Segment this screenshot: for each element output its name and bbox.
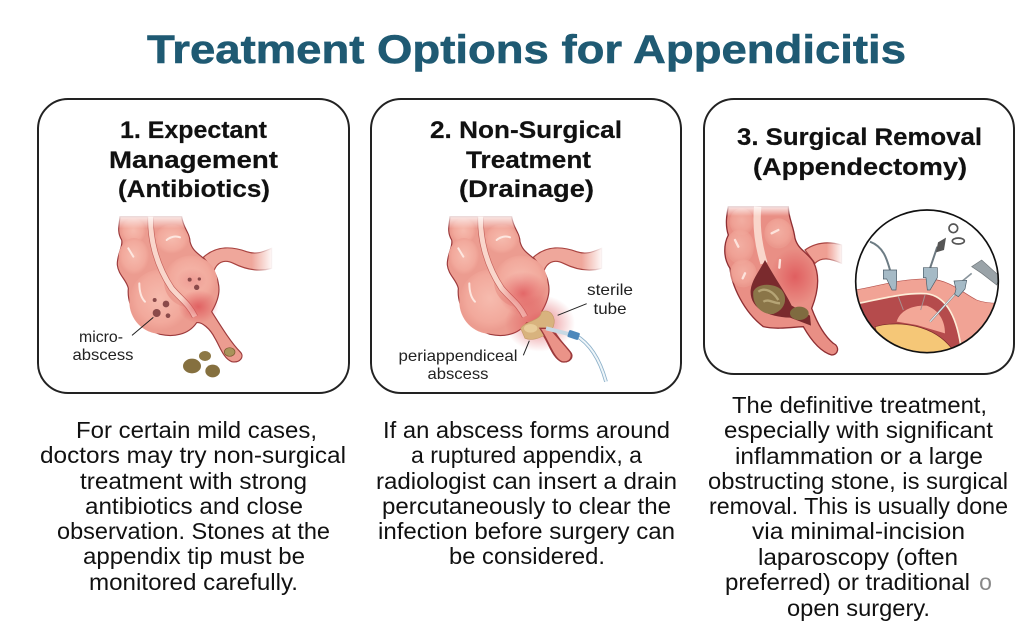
heading: panel 3	[737, 124, 982, 181]
text block: panel 3 description: especially with significant	[724, 417, 994, 443]
text block: panel 2 description: a ruptured appendix, a	[411, 442, 642, 468]
illustration: appendix with obstructing stone	[723, 204, 843, 355]
text block: panel 2 description: infection before surgery can	[378, 518, 675, 544]
heading: panel 2: 2. Non-Surgical	[430, 117, 622, 144]
text block: panel 3 description: obstructing stone, is surgical	[708, 468, 1008, 494]
text block: panel 3 description: The definitive treatment,	[732, 392, 987, 418]
text block: panel 1 description: appendix tip must be	[83, 543, 305, 569]
text block: panel 1 description: observation. Stones at the	[57, 518, 330, 544]
text block: panel 1 description: doctors may try non-surgical	[40, 442, 346, 468]
text block: panel 2 description: percutaneously to clear the	[382, 493, 671, 519]
text block: panel 3 description: removal. This is usually done	[709, 493, 1008, 519]
text block: panel 3 description: inflammation or a large	[735, 443, 983, 469]
panel: expectant management	[38, 99, 349, 393]
heading: panel 2: Treatment	[466, 147, 591, 174]
heading: panel 1: Management	[109, 147, 278, 174]
text block: panel 3 description: via minimal-incision	[752, 518, 965, 544]
heading: panel 2	[430, 117, 622, 203]
text block: panel 2 description	[376, 417, 677, 569]
title: Treatment Options for Appendicitis	[147, 28, 906, 72]
text block: panel 3 description: preferred) or traditional	[725, 569, 970, 595]
heading: panel 1: (Antibiotics)	[118, 176, 270, 203]
label: periappendiceal abscess	[398, 348, 518, 383]
text block: panel 1 description	[40, 417, 346, 595]
illustration: inflamed appendix with micro-abscesses and stones	[113, 213, 273, 377]
text block: panel 1 description: treatment with strong	[80, 468, 307, 494]
text block: panel 3 description: laparoscopy (often	[758, 544, 958, 570]
text block: panel 1 description: monitored carefully.	[89, 569, 298, 595]
text block: panel 2 description: If an abscess forms around	[383, 417, 670, 443]
heading: panel 1: 1. Expectant	[120, 117, 267, 144]
heading: panel 3: (Appendectomy)	[753, 154, 967, 181]
panel: surgical removal	[704, 99, 1014, 374]
illustration: laparoscopy inset	[855, 210, 1000, 358]
label: periappendiceal abscess: periappendiceal	[398, 348, 518, 365]
label: sterile tube: sterile	[587, 282, 633, 299]
label: sterile tube: tube	[594, 301, 627, 318]
text block: panel 3 description: o	[979, 569, 992, 595]
illustration: drained periappendiceal abscess	[443, 213, 606, 382]
panel: non-surgical treatment	[371, 99, 681, 393]
label: sterile tube	[587, 282, 633, 318]
heading: panel 1	[109, 117, 278, 203]
label: periappendiceal abscess: abscess	[428, 366, 488, 383]
text block: panel 1 description: antibiotics and close	[85, 493, 303, 519]
text block: panel 2 description: be considered.	[449, 543, 605, 569]
text block: panel 2 description: radiologist can insert a drain	[376, 468, 677, 494]
label: micro-abscess: micro-	[79, 329, 123, 346]
label: micro-abscess: abscess	[72, 347, 134, 364]
heading: panel 2: (Drainage)	[459, 176, 594, 203]
heading: panel 3: 3. Surgical Removal	[737, 124, 982, 151]
text block: panel 3 description: open surgery.	[787, 595, 930, 621]
text block: panel 1 description: For certain mild cases,	[76, 417, 317, 443]
label: micro-abscess	[72, 329, 134, 364]
text block: panel 3 description	[708, 392, 1008, 621]
